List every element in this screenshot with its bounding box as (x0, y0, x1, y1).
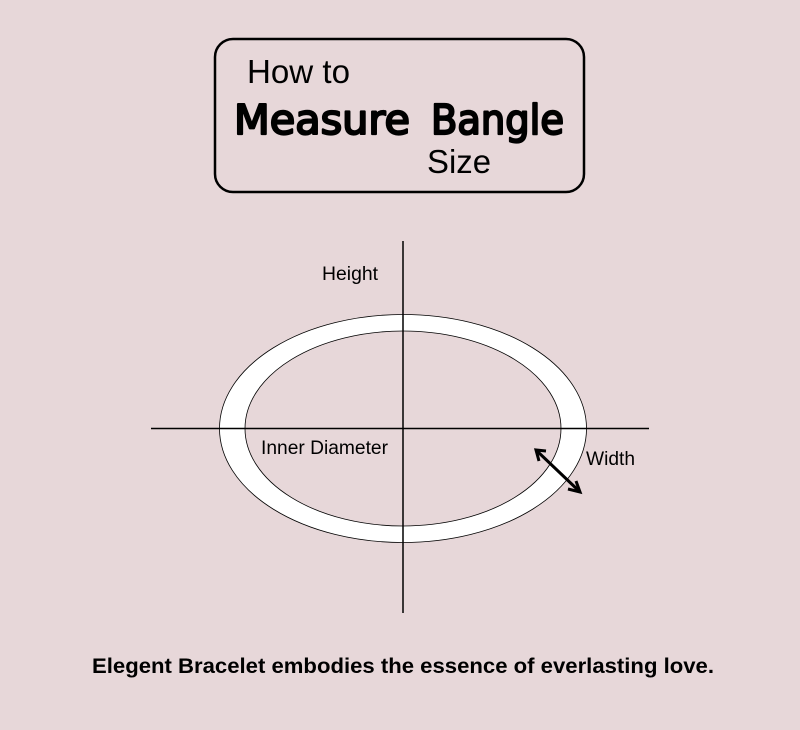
label: height: Height (322, 264, 379, 285)
diameter axis (151, 428, 649, 430)
title box: Size (427, 143, 491, 180)
title box: Bangle (431, 96, 564, 144)
arrow: width (536, 450, 580, 492)
label: inner diameter: Inner Diameter (261, 438, 389, 459)
caption: Elegent Bracelet embodies the essence of everlasting love. (92, 654, 714, 678)
label: width: Width (586, 449, 635, 470)
title box: Measure (234, 96, 410, 144)
title box (215, 39, 584, 192)
height axis (402, 241, 404, 613)
bangle ring diagram (220, 314, 586, 542)
title box: How to (247, 53, 350, 90)
